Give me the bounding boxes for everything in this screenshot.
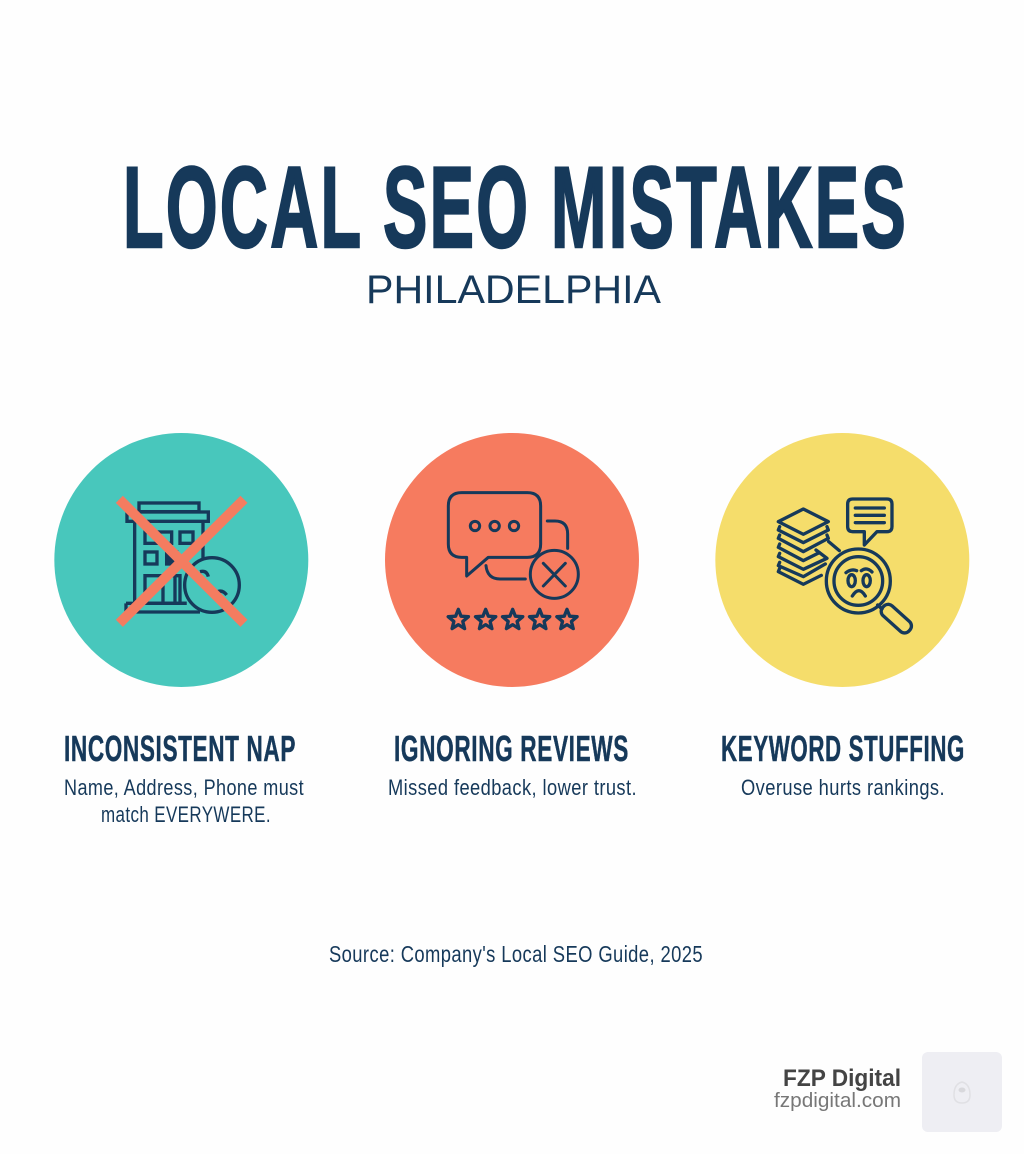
- logo tile: [922, 1052, 1002, 1132]
- text: NAP description: match EVERYWERE.: [101, 802, 271, 827]
- source line: Source: Company's Local SEO Guide, 2025: [329, 941, 703, 967]
- heading: inconsistent NAP: INCONSISTENT NAP: [64, 728, 296, 769]
- footer branding: [774, 1052, 1002, 1132]
- icon: faint bear logo: [954, 1082, 970, 1103]
- icon: back speech bubble: [486, 521, 568, 579]
- icon: building and phone outline: [126, 503, 239, 612]
- icon: main speech bubble: [448, 493, 541, 576]
- icon: five stars: [448, 609, 577, 629]
- icon: coral cross: [119, 499, 244, 623]
- icon: teal circle with crossed building: [54, 433, 308, 687]
- text: NAP description: Name, Address, Phone must: [64, 775, 304, 800]
- text: stuffing description: Overuse hurts rankings.: [741, 775, 945, 800]
- text: reviews description: Missed feedback, lower trust.: [388, 775, 637, 800]
- text: NAP description: [64, 775, 304, 827]
- icon: magnifier with sad face: [826, 549, 890, 613]
- panel: inconsistent NAP: [54, 433, 308, 827]
- heading: ignoring reviews: IGNORING REVIEWS: [394, 728, 629, 769]
- icon: comment bubble: [848, 499, 892, 545]
- brand url: fzpdigital.com: [774, 1090, 901, 1112]
- icon: x badge: [530, 550, 578, 598]
- icon: layered stack: [778, 509, 828, 534]
- icon: yellow circle with stack and magnifier: [715, 433, 969, 687]
- icon: coral circle with speech bubbles and stars: [385, 433, 639, 687]
- panel: keyword stuffing: [715, 433, 969, 800]
- brand name: FZP Digital: [783, 1065, 901, 1092]
- subtitle: PHILADELPHIA: [366, 268, 661, 312]
- panel: ignoring reviews: [385, 433, 639, 800]
